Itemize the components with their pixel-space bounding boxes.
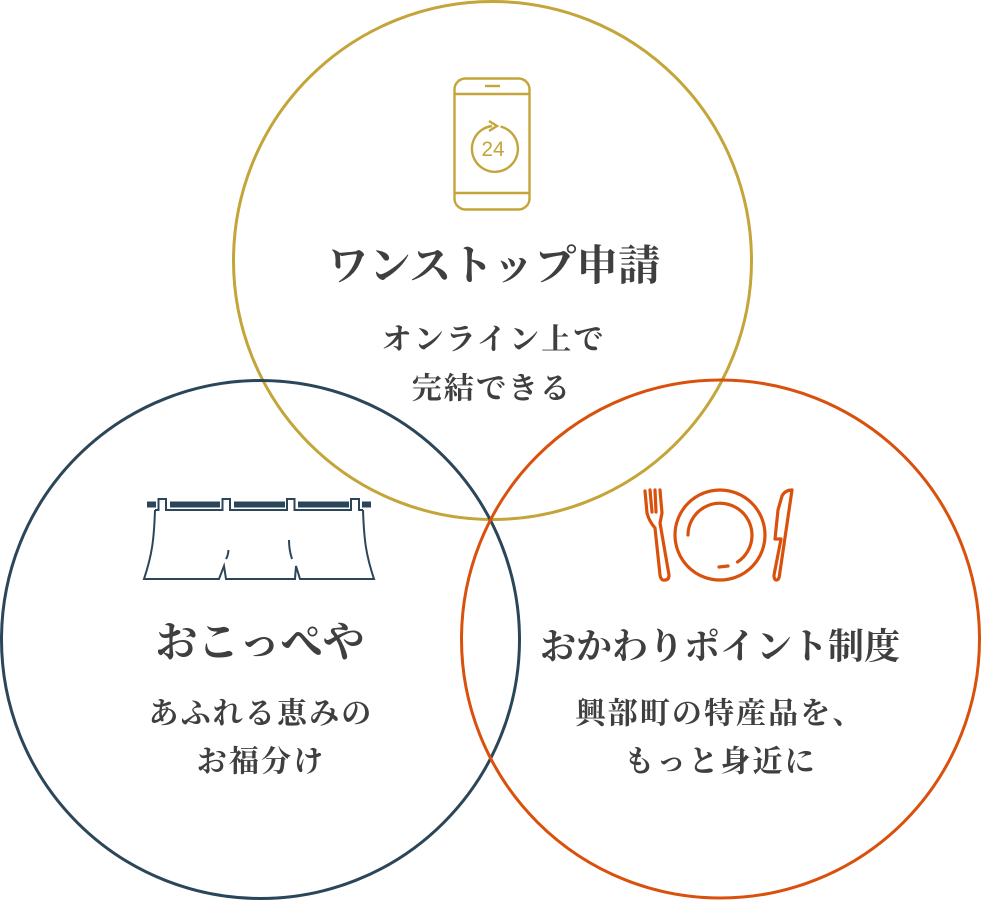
icon: fork, plate and knife [645, 490, 792, 580]
text: one-stop description [382, 324, 605, 406]
icon: noren curtain [144, 499, 374, 579]
heading: one-stop application: ワンストップ申請 [327, 243, 660, 290]
text: okawari description [576, 698, 864, 778]
heading: okawari point system: おかわりポイント制度 [540, 626, 900, 666]
circle: orange okawari [462, 380, 980, 898]
text: okoppeya description: あふれる恵みの [149, 698, 373, 730]
text: okoppeya description: お福分け [197, 746, 325, 778]
icon: smartphone with 24-hour arrow: 24 [482, 138, 505, 161]
text: one-stop description: オンライン上で [382, 324, 605, 356]
text: okoppeya description [149, 698, 373, 778]
text: okawari description: 興部町の特産品を、 [576, 698, 864, 730]
circle: gold one-stop [234, 2, 752, 520]
circle: navy okoppeya [2, 380, 520, 898]
icon: smartphone with 24-hour arrow [454, 78, 530, 210]
heading: okoppeya: おこっぺや [155, 620, 365, 666]
text: one-stop description: 完結できる [412, 372, 572, 406]
text: okawari description: もっと身近に [624, 746, 817, 778]
